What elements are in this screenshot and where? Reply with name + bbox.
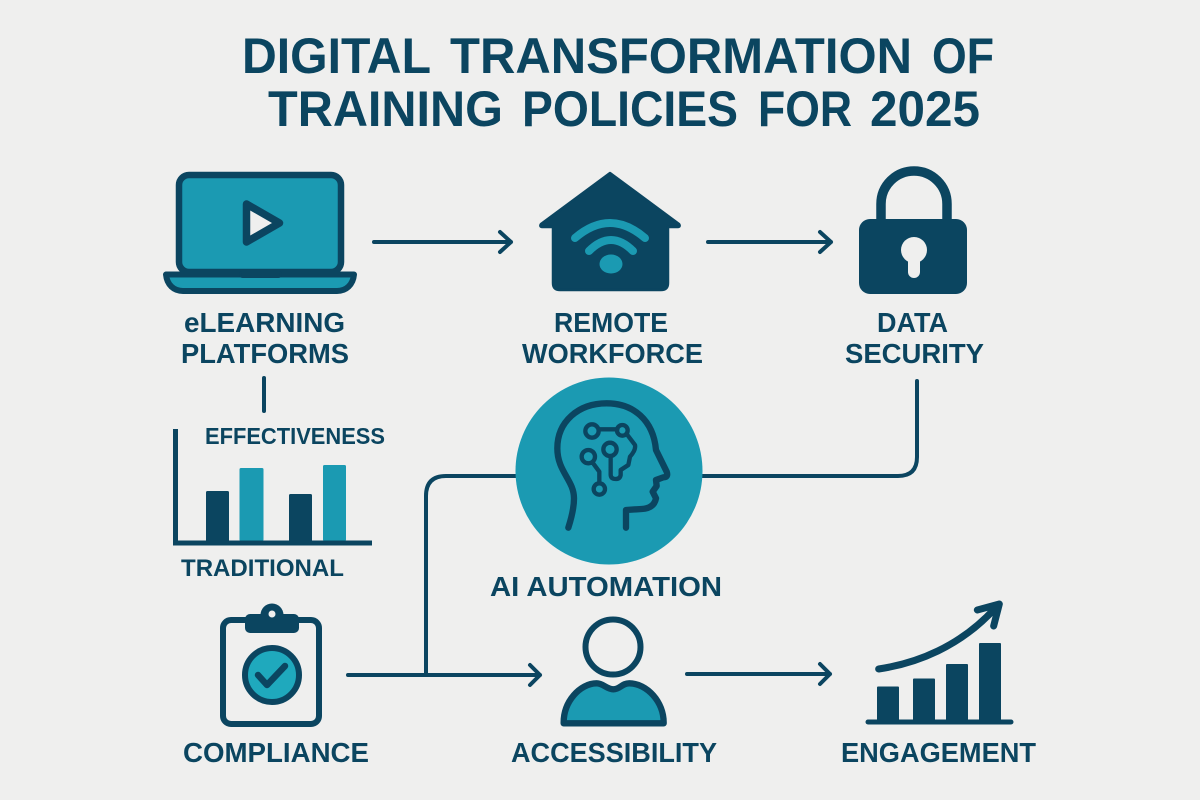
arrow: remote workforce to data security — [708, 232, 831, 252]
label: Accessibility: ACCESSIBILITY — [511, 737, 717, 768]
icon: laptop with play button — [166, 175, 354, 291]
icon: circle with AI head — [516, 378, 702, 564]
title: POLICIES — [522, 80, 738, 137]
icon: clipboard with check — [223, 604, 319, 724]
icon: person — [564, 620, 664, 723]
chart heading: Effectiveness: EFFECTIVENESS — [205, 423, 385, 449]
label: eLearning Platforms: eLEARNING — [184, 307, 345, 338]
icon: padlock — [859, 171, 967, 294]
label: Remote Workforce — [522, 307, 703, 369]
chart label: Traditional: TRADITIONAL — [181, 555, 344, 582]
panel: data security — [845, 171, 984, 369]
panel: compliance — [183, 604, 369, 768]
label: Compliance: COMPLIANCE — [183, 737, 369, 768]
label: Data Security: SECURITY — [845, 338, 984, 369]
label: AI Automation: AI AUTOMATION — [490, 571, 722, 602]
label: Data Security — [845, 307, 984, 369]
connector: compliance to AI automation — [426, 476, 520, 675]
label: Remote Workforce: WORKFORCE — [522, 338, 703, 369]
panel: engagement — [841, 604, 1036, 768]
label: Engagement: ENGAGEMENT — [841, 737, 1036, 768]
panel: bar chart effectiveness vs traditional — [176, 423, 385, 582]
title — [242, 27, 994, 137]
bar chart — [176, 429, 372, 543]
label: Data Security: DATA — [877, 307, 948, 338]
title: DIGITAL — [242, 27, 431, 84]
label: eLearning Platforms: PLATFORMS — [181, 338, 349, 369]
panel: remote workforce — [522, 173, 703, 369]
arrow: accessibility to engagement — [687, 664, 830, 684]
title: TRANSFORMATION — [450, 27, 912, 84]
panel: AI automation — [490, 378, 722, 602]
arrow: compliance to accessibility — [348, 665, 540, 685]
title: 2025 — [870, 80, 980, 137]
connector: data security to AI automation — [700, 381, 917, 476]
arrow: eLearning to remote workforce — [374, 232, 511, 252]
icon: house with wifi — [540, 173, 680, 290]
title: TRAINING — [268, 80, 503, 137]
label: Remote Workforce: REMOTE — [554, 307, 668, 338]
label: eLearning Platforms — [181, 307, 349, 369]
title: FOR — [758, 80, 852, 137]
panel: accessibility — [511, 620, 717, 768]
connector: eLearning to chart — [262, 378, 266, 411]
title: OF — [932, 27, 994, 84]
panel: eLearning platforms — [166, 175, 354, 369]
icon: rising bars with arrow — [868, 604, 1011, 722]
